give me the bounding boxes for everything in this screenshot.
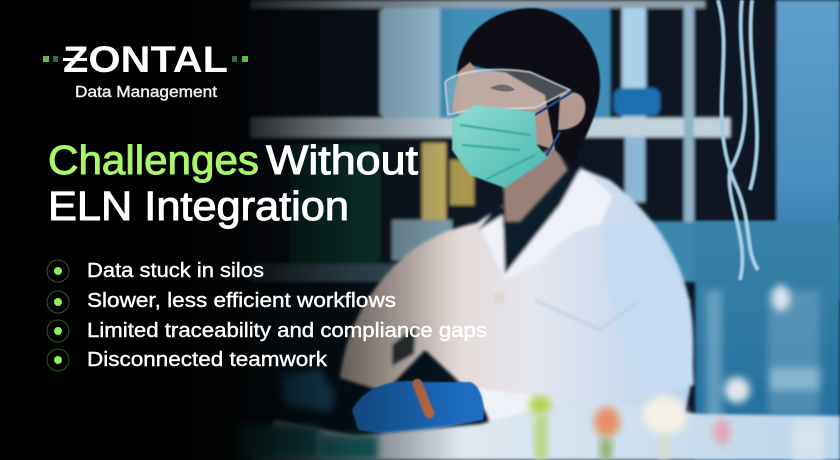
logo subtitle: Data Management bbox=[75, 84, 218, 101]
blurred foreground bench and flasks bbox=[240, 377, 840, 460]
goggles bbox=[445, 70, 570, 115]
neck bbox=[503, 145, 568, 222]
logo wordmark: ZONTAL bbox=[63, 39, 228, 80]
logo left squares bbox=[43, 56, 58, 62]
surgical mask bbox=[452, 105, 548, 188]
tubing bbox=[718, 0, 758, 280]
eye bbox=[490, 84, 515, 92]
logo Z crossbar bbox=[63, 58, 87, 61]
lab shelving bbox=[250, 0, 780, 282]
hair bbox=[457, 8, 600, 165]
title bbox=[48, 137, 419, 229]
bullet list bbox=[47, 260, 487, 371]
lab coat cuff bbox=[478, 388, 545, 425]
logo bbox=[43, 39, 248, 101]
left glove bbox=[280, 368, 335, 412]
item 4: Disconnected teamwork bbox=[87, 349, 328, 371]
scientist figure bbox=[280, 8, 694, 436]
face bbox=[452, 62, 555, 150]
title: Without bbox=[266, 137, 419, 183]
strap bbox=[535, 92, 572, 158]
ear bbox=[558, 92, 585, 130]
item 1: Data stuck in silos bbox=[87, 260, 264, 282]
lab coat bbox=[340, 160, 694, 425]
item 2: Slower, less efficient workflows bbox=[87, 290, 396, 312]
title: Challenges bbox=[48, 137, 259, 183]
title: ELN Integration bbox=[48, 183, 349, 229]
item 3: Limited traceability and compliance gaps bbox=[87, 320, 487, 342]
right blue wall bbox=[776, 0, 840, 300]
logo right squares bbox=[232, 56, 248, 62]
blurred glassware background bbox=[706, 285, 820, 420]
blue glove bbox=[352, 381, 484, 436]
